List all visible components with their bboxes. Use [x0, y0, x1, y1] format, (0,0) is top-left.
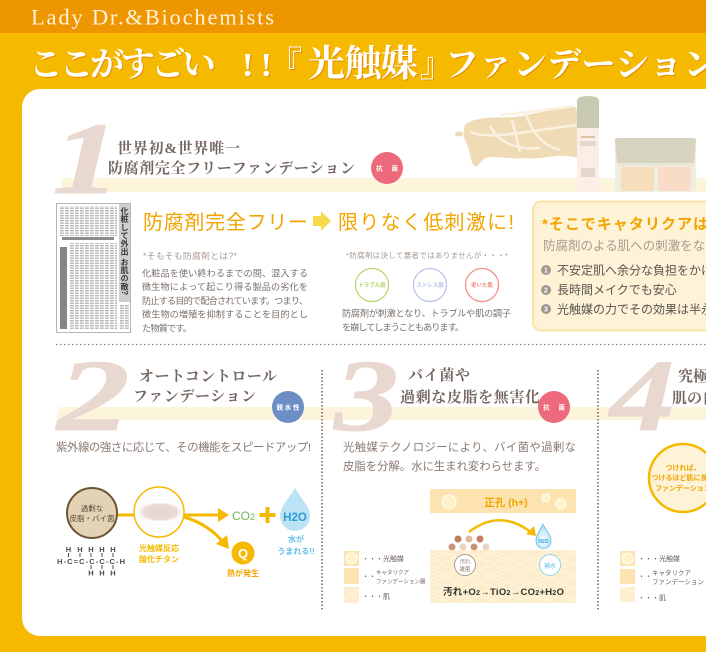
- title: [29, 43, 706, 85]
- section 3 description: 光触媒テクノロジーにより、バイ菌や過剰な: [343, 440, 576, 454]
- section 4 callout circle: つければ、: [666, 463, 700, 472]
- water drop: H2O: [283, 512, 307, 524]
- dirt circle: 雑菌: [459, 565, 471, 573]
- what are preservatives text: *そもそも防腐剤とは?*: [143, 250, 238, 261]
- section 4 legend: キャタリクア: [652, 568, 692, 577]
- skin types: を崩してしまうこともあります。: [342, 322, 464, 332]
- positive hole band: [430, 489, 576, 513]
- section 3 heading: 抗 菌: [543, 402, 566, 412]
- section 1 heading: 防腐剤完全フリーファンデーション: [108, 159, 355, 177]
- section 4 callout circle: [649, 444, 706, 512]
- heat Q: [227, 542, 259, 578]
- section 3 heading: バイ菌や: [408, 366, 470, 384]
- section 3 heading: 過剰な皮脂を無害化: [400, 388, 540, 406]
- section 3 heading: [333, 340, 570, 453]
- newspaper clipping: [56, 204, 130, 332]
- dirt particles: [448, 536, 490, 550]
- header band: Lady Dr.&Biochemists: [31, 4, 274, 30]
- water drop: 水が: [288, 534, 304, 544]
- titanium oxide circle: 酸化チタン: [139, 554, 179, 564]
- orange headline: 限りなく低刺激に!: [338, 211, 514, 234]
- section 2 heading: ファンデーション: [133, 388, 256, 405]
- trouble skin: [356, 268, 388, 302]
- CO2: CO2: [232, 509, 255, 523]
- structural formula: H: [110, 545, 116, 554]
- skin types: 防腐剤が刺激となり、トラブルや肌の調子: [342, 308, 511, 318]
- section 2 heading: 2: [55, 340, 130, 453]
- section 4 legend: ・・・肌: [638, 594, 666, 602]
- what are preservatives text: た物質です。: [142, 322, 192, 334]
- structural formula: [57, 545, 125, 578]
- titanium oxide circle: [134, 487, 184, 564]
- orange headline: 防腐剤完全フリー: [143, 211, 308, 234]
- section 2 heading: オートコントロール: [139, 368, 277, 385]
- catalyst callout: [533, 202, 706, 330]
- water circle: 補水: [544, 562, 556, 570]
- section 3 legend: [344, 551, 425, 603]
- section 3 legend: ・・: [362, 574, 376, 580]
- dirt circle: 汚れ: [459, 558, 471, 566]
- header band: [0, 0, 706, 33]
- catalyst callout: 2: [544, 288, 548, 294]
- what are preservatives text: [142, 250, 308, 334]
- structural formula: H: [66, 545, 71, 554]
- foundation swatch: [455, 106, 578, 167]
- catalyst callout: 長時間メイクでも安心: [557, 283, 677, 297]
- section 4 legend: ・・: [638, 574, 652, 580]
- skin types: *防腐剤は決して悪者ではありませんが・・・*: [346, 250, 508, 260]
- section 2 heading: 親水性: [276, 402, 300, 412]
- sebum circle: [67, 488, 117, 538]
- orange headline: [143, 211, 514, 234]
- compact: [615, 138, 696, 192]
- structural formula: H: [99, 545, 105, 554]
- what are preservatives text: 微生物によって起こり得る製品の劣化を: [142, 281, 308, 292]
- section 4 legend: ・・・光触媒: [638, 554, 680, 563]
- catalyst callout: 3: [544, 306, 548, 314]
- structural formula: H: [99, 568, 105, 578]
- catalyst callout: 防腐剤のよる肌への刺激をな: [543, 238, 705, 253]
- section 3 description: 皮脂を分解。水に生まれ変わらせます。: [343, 459, 546, 473]
- section 4 heading: [608, 340, 706, 453]
- section 2 description: 紫外線の強さに応じて、その機能をスピードアップ!: [56, 440, 311, 454]
- section 3 description: [343, 440, 576, 473]
- what are preservatives text: 防止する目的で配合されています。つまり、: [142, 295, 308, 306]
- catalyst callout: *そこでキャタリクアは: [542, 216, 706, 233]
- formula: 汚れ+O2→TiO2→CO2+H2O: [443, 586, 564, 598]
- titanium oxide circle: 光触媒反応: [139, 543, 179, 553]
- section 3 legend: キャタリクア: [376, 568, 410, 576]
- connector arrows: [115, 508, 229, 549]
- structural formula: H: [88, 545, 94, 554]
- positive hole band: 正孔 (h+): [484, 497, 528, 509]
- section 1 heading: [52, 102, 706, 216]
- drop: [536, 524, 551, 549]
- section 1 heading: 世界初&世界唯一: [117, 139, 240, 157]
- section 4 legend: [620, 551, 704, 602]
- section 3 legend: ・・・光触媒: [362, 554, 404, 563]
- plus: [260, 507, 276, 523]
- structural formula: H: [88, 568, 94, 578]
- skin types: [342, 250, 511, 332]
- bottle: [577, 96, 599, 192]
- section 3 legend: ・・・肌: [362, 592, 390, 600]
- water drop: うまれる!!: [277, 547, 315, 556]
- arrow: [469, 520, 532, 533]
- aged skin: [466, 268, 498, 302]
- dirt circle: [454, 554, 476, 576]
- photocatalyst diagram: [430, 489, 576, 603]
- water circle: [540, 554, 560, 576]
- title: 『: [268, 47, 302, 84]
- section 4 heading: 4: [608, 340, 675, 453]
- skin layer: [430, 550, 576, 603]
- trouble skin: トラブル肌: [358, 281, 386, 289]
- structural formula: H-C=C-C-C-C-H: [57, 557, 125, 566]
- section 1 heading: 1: [52, 102, 121, 216]
- newspaper clipping: 化粧して外出 お肌の敵?: [120, 206, 129, 295]
- sebum circle: 過剰な: [81, 503, 103, 513]
- section 4 legend: ファンデーション: [652, 577, 704, 586]
- title: 光触媒: [308, 43, 418, 85]
- water drop: [277, 488, 315, 556]
- section 1 heading: 抗 菌: [376, 164, 398, 172]
- drop: H2O: [538, 539, 549, 545]
- section 3 legend: ファンデーション層: [376, 578, 425, 586]
- what are preservatives text: 微生物の増殖を抑制することを目的とし: [142, 308, 308, 320]
- product images: [455, 96, 696, 192]
- reaction diagram: [57, 487, 315, 578]
- heat Q: Q: [238, 546, 248, 561]
- title: !!: [242, 47, 272, 84]
- what are preservatives text: 化粧品を使い終わるまでの間、混入する: [142, 268, 308, 278]
- stress skin: ストレス肌: [416, 282, 444, 289]
- sebum circle: 皮脂・バイ菌: [70, 513, 115, 523]
- section 2 heading: [55, 340, 706, 453]
- title: 』: [420, 47, 454, 84]
- section 3 heading: 3: [333, 340, 399, 453]
- stress skin: [414, 268, 446, 302]
- catalyst callout: 1: [544, 268, 548, 274]
- structural formula: H: [110, 568, 116, 578]
- aged skin: 老いた肌: [471, 281, 493, 289]
- title: ここがすごい: [29, 47, 216, 84]
- structural formula: H: [77, 545, 83, 554]
- heat Q: 熱が発生: [227, 568, 259, 578]
